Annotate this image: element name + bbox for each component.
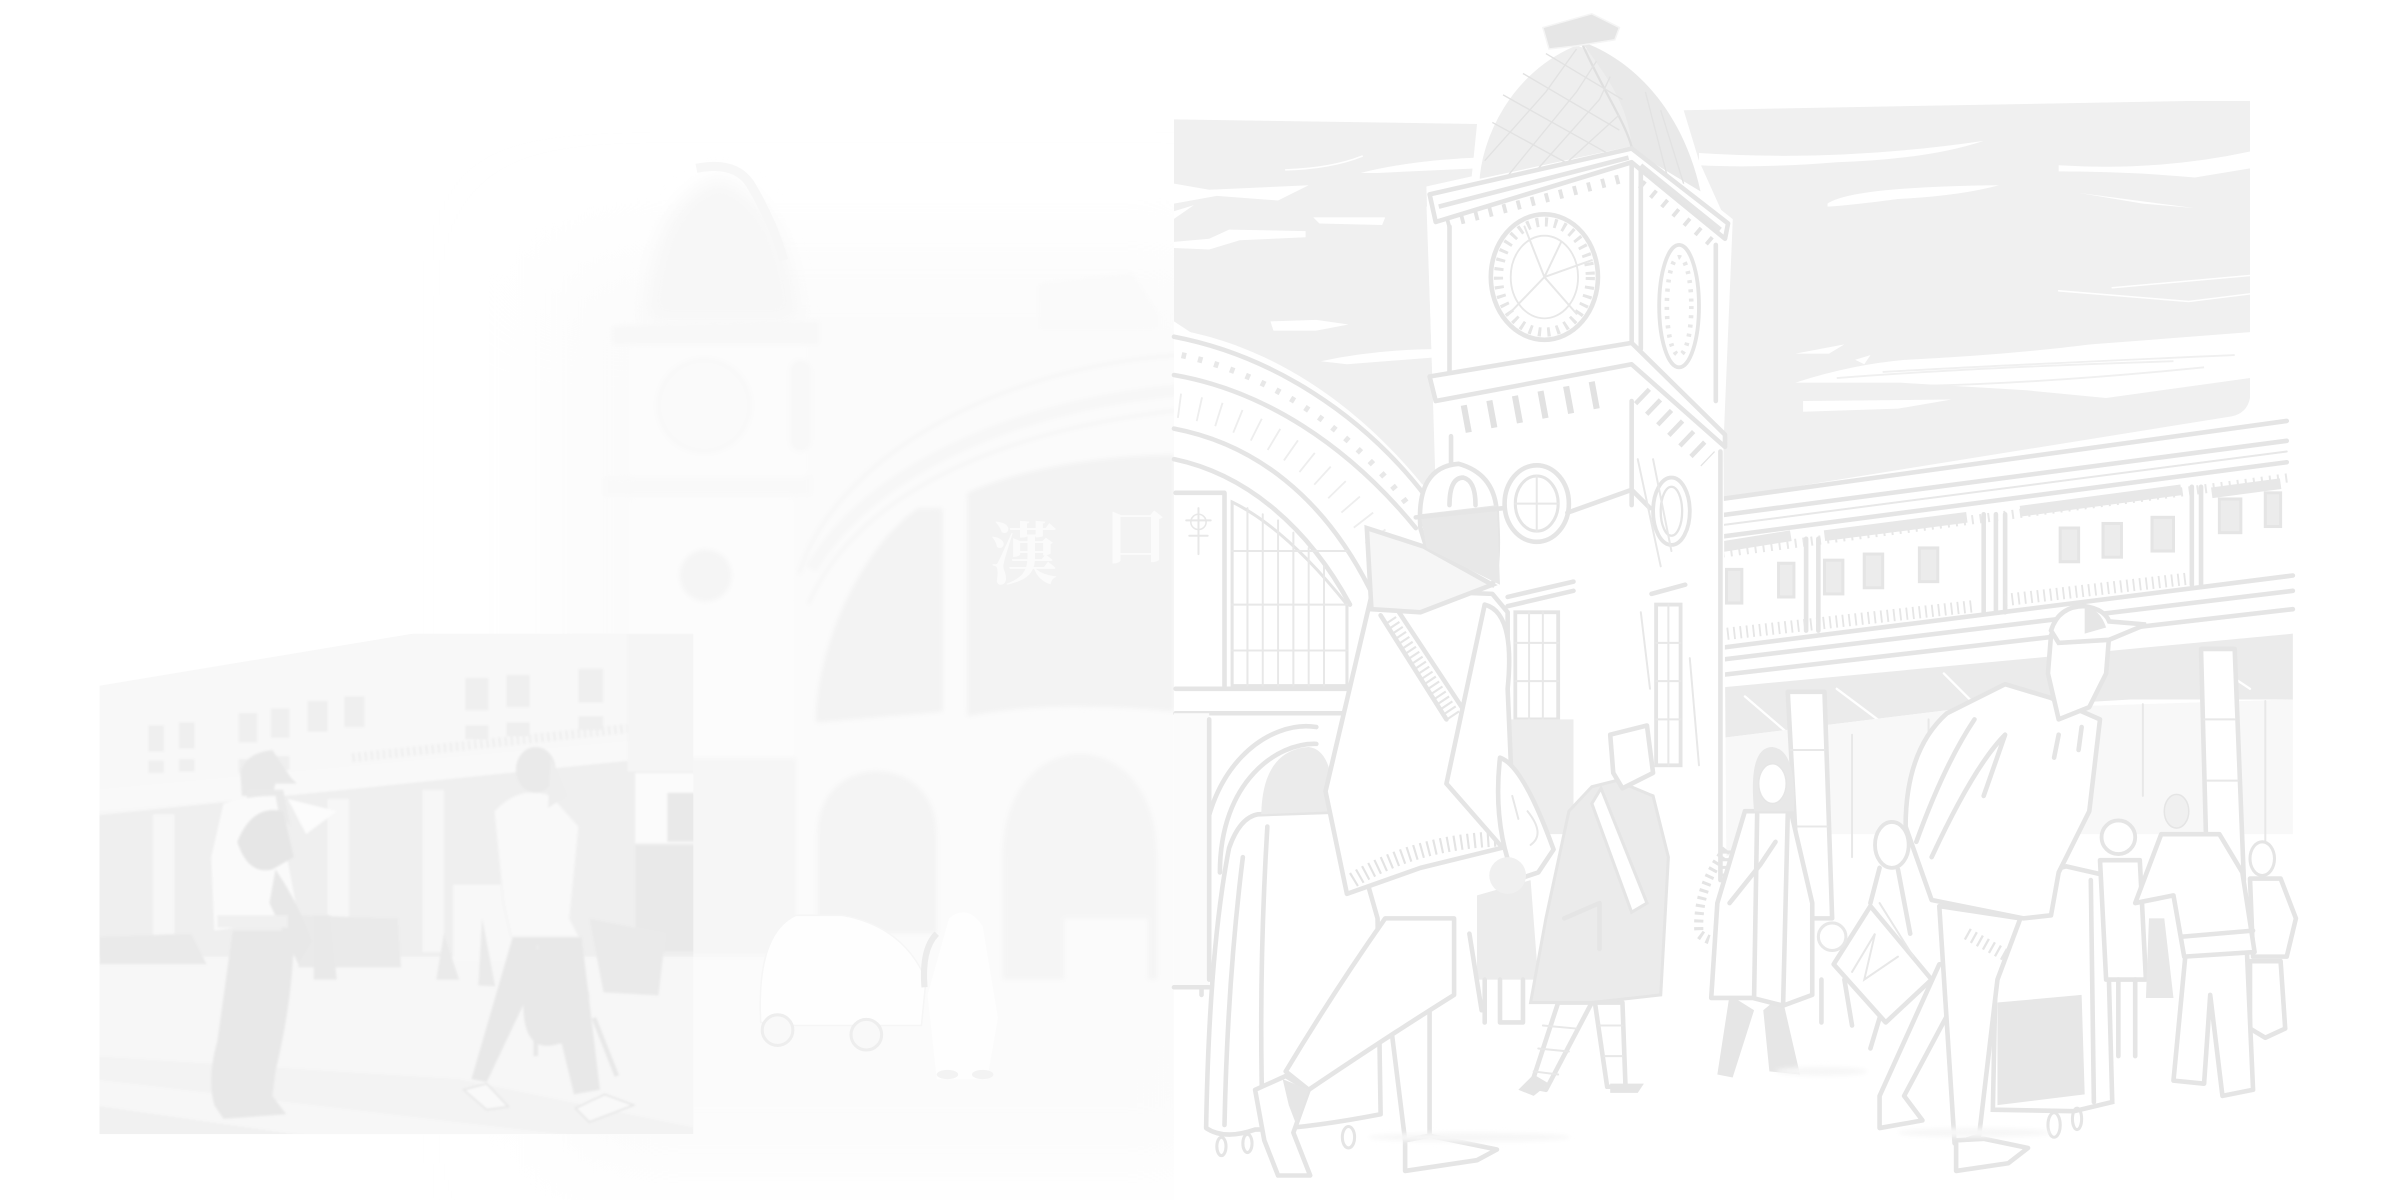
clock face side [1659,245,1699,367]
shoe [1956,1139,2028,1171]
sleeve [1446,605,1531,857]
head with hood [1610,726,1653,788]
upper storey building [92,634,704,811]
round windows [1505,465,1690,545]
coat [1711,811,1812,1006]
long coat [1326,589,1508,894]
face [2048,635,2109,719]
figure: child and shopping bag [1818,822,1932,1048]
shoe [1405,1136,1497,1171]
sketch: sky with clouds [1174,101,2250,505]
bag [1564,903,1599,949]
colonnade shadow [1723,634,2293,738]
figure: woman with phone [1699,747,1812,1078]
tower edges [1451,401,1720,880]
hoodie [1906,684,2100,918]
backpack pocket [1498,758,1554,880]
worker in protective suit [921,932,938,988]
arched windows [816,508,943,722]
trailing foot [1255,1076,1310,1176]
pedestrian with backpack [464,747,634,1122]
cape collar [1367,528,1492,612]
lower cornice [1430,343,1725,459]
figure: man seen from behind and bystander [2135,794,2296,1096]
legs [1531,1003,1626,1090]
pilasters [1806,487,2201,631]
plaza ground [478,986,657,998]
great arch [628,329,1179,980]
ground shadows [1368,1067,2051,1142]
faded background photo of station facade [682,455,1174,1079]
lower arched door [1202,726,1316,995]
tower dome [646,178,799,321]
cap [2051,606,2146,643]
balustrade [352,729,628,758]
figure: central crowd and bags [1469,857,1538,1022]
finial [1543,14,1619,49]
face and hair [1753,747,1794,811]
head [2164,794,2189,828]
crowd [99,915,666,998]
tower body [1433,147,1727,888]
bystander [2250,842,2274,876]
colonnade [170,762,634,810]
tower body [605,321,819,957]
station name sign [990,503,1168,594]
sketch: right wing of station [1699,419,2293,918]
suitcase [1993,866,2112,1111]
figure: traveller in dark coat [1518,726,1668,1096]
sketch: clock tower [1430,14,1728,888]
upper cornice [1430,148,1728,245]
coat [1531,781,1668,1003]
rear leg [1385,980,1430,1140]
figure: small passerby in scarf [2100,820,2173,1056]
shoes [1518,1074,1549,1096]
wall emblem [1186,508,1211,554]
robot vehicle [761,916,884,1052]
hall window grid [1232,502,1347,686]
dome [1476,41,1701,191]
rear leg [1880,964,1974,1128]
hair of figure behind [1261,747,1333,814]
officer with megaphone [211,750,337,1119]
figure: traveller in hoodie with suitcase [1880,606,2146,1171]
photo inset: officers on the plaza [100,669,693,1134]
figure: traveller with rolling suitcase, foreground left [1206,464,1554,1176]
roof lantern on arch [1038,272,1159,329]
station name sign: 漢 [990,519,1058,594]
lower arches [817,771,937,934]
front leg [1939,906,2020,1143]
jacket [2135,834,2255,957]
striped bag [1699,849,1727,940]
balustrade [1714,579,2189,635]
station name sign: 口 [1104,503,1168,574]
windows [148,669,603,773]
round tower window [680,549,732,602]
legs [2173,952,2253,1096]
large suitcase [1206,811,1381,1135]
tall windows [1508,582,1685,834]
hatching strap [1390,620,1454,716]
upper windows [1727,493,2281,603]
wheels [1217,1137,1226,1156]
sketch: arched hall [1174,329,1433,995]
clock face front [1491,214,1598,340]
legs [1717,995,1800,1078]
helmet and mask [1420,464,1498,585]
front leg [1286,918,1454,1090]
columns [1788,649,2244,918]
